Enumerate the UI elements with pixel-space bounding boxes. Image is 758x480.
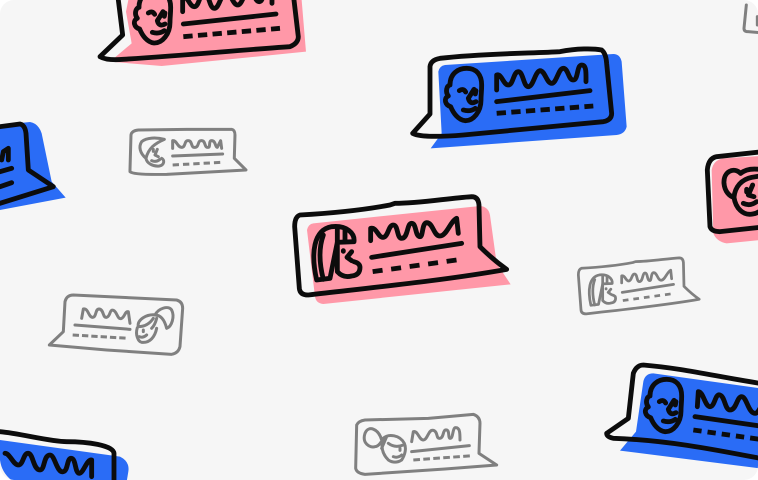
bubble outline	[130, 129, 246, 174]
bubble outline and contents	[0, 432, 114, 480]
bubble outline and contents	[413, 49, 612, 136]
grey bubble: cap face	[130, 129, 246, 174]
speech bubble: right pink cap	[707, 152, 758, 243]
cap face	[140, 138, 164, 166]
bubble outline	[356, 414, 497, 474]
bubble outline and contents	[0, 124, 53, 203]
blue backing shape	[620, 373, 758, 468]
text line	[412, 446, 469, 452]
blue backing shape	[0, 440, 129, 480]
speech bubble: top right blue man	[413, 49, 627, 148]
wave text line	[412, 428, 460, 442]
bubble outline and contents	[607, 365, 758, 458]
speech bubble: top pink man	[100, 0, 306, 66]
pink backing shape	[712, 156, 758, 243]
face and text lines	[589, 270, 674, 305]
grey bubble: woman with straight hair	[578, 258, 699, 314]
pink backing shape	[110, 0, 306, 66]
speech bubble: bottom right blue man	[607, 365, 758, 468]
speech bubble: centre pink woman	[295, 197, 511, 304]
dashed text line	[73, 335, 128, 338]
bubble outline and contents	[295, 197, 507, 295]
bubble outline	[49, 295, 183, 354]
pink backing shape	[307, 206, 511, 304]
blue backing shape	[0, 122, 66, 210]
grey bubble: ponytail face, tail right	[356, 414, 497, 474]
ponytail face	[137, 308, 173, 342]
speech bubble: bottom left blue cropped	[0, 432, 129, 480]
grey bubble: ponytail face, tail left	[49, 295, 183, 354]
bubble outline	[578, 258, 699, 314]
ponytail face	[364, 429, 405, 462]
speech bubble: left blue cropped	[0, 122, 66, 210]
blue backing shape	[431, 54, 627, 148]
wave text line	[173, 141, 222, 148]
dashed text line	[413, 456, 472, 460]
text line	[173, 154, 223, 156]
bubble outline and contents	[707, 152, 758, 232]
grey bubble: top right corner fragment	[744, 5, 758, 33]
bubble outline and contents	[100, 0, 298, 60]
wave text line	[82, 309, 130, 323]
dashed text line	[173, 162, 222, 165]
text line	[75, 325, 130, 329]
